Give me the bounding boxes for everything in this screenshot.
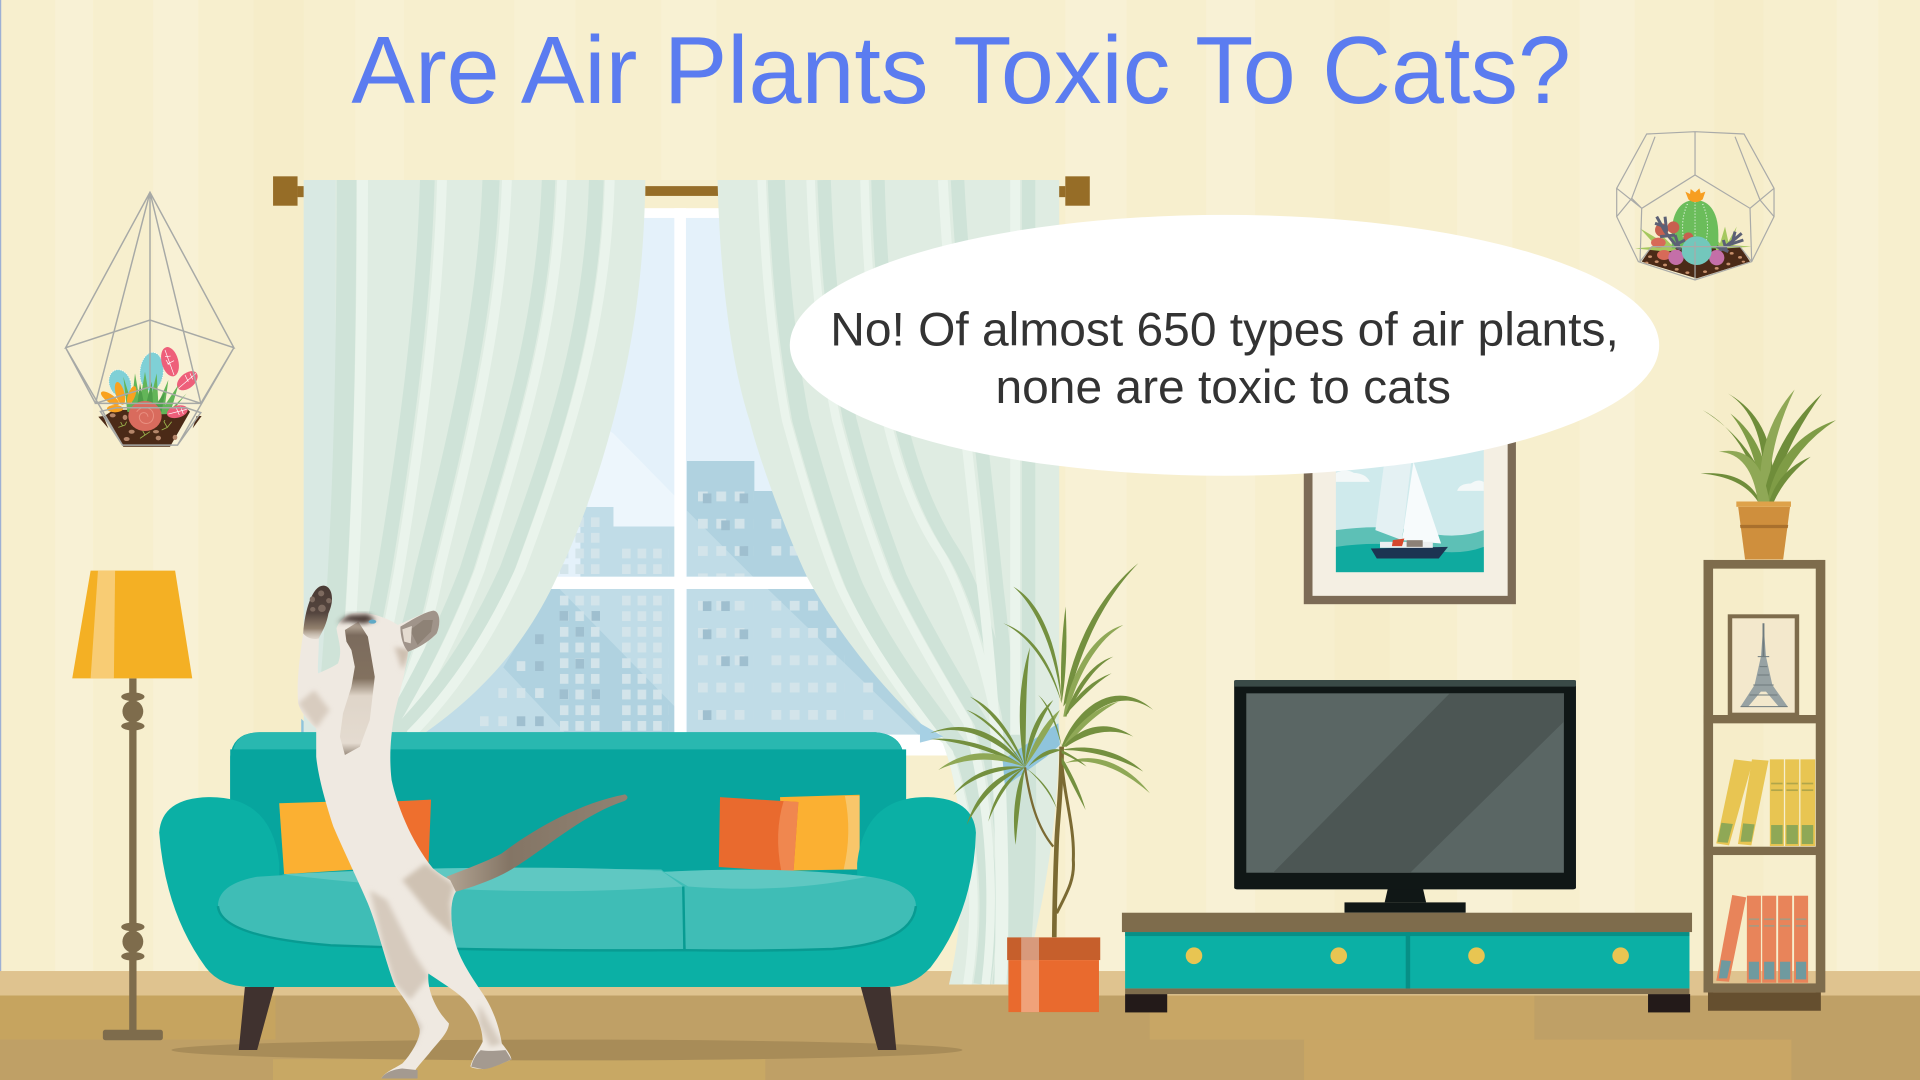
raised paw [303,586,332,639]
plants and soil [98,345,202,447]
cat feet [381,1050,511,1078]
grass [1635,227,1752,253]
potted plant on shelf [1701,389,1836,560]
cabinet [1122,913,1692,1012]
terracotta pot [1736,501,1791,560]
floor and baseboard [0,971,1920,1080]
speech bubble [790,215,1659,476]
boat [1371,538,1448,559]
floor lamp [72,571,192,1040]
cat shading [298,647,502,1047]
cat ear [400,611,439,652]
window with city view [301,208,970,756]
floor shadow under sofa [171,1040,962,1060]
cat face mask [338,614,376,624]
sails [1375,462,1441,544]
framed sailboat picture [1304,400,1516,604]
soil [1642,247,1750,278]
clouds [1336,471,1484,491]
orange books [1716,895,1808,983]
answer text: No! Of almost 650 types of air plants, [830,302,1619,355]
curtain rod [273,176,1090,206]
hanging terrarium right [1617,132,1774,280]
plant stems [1025,747,1073,937]
cactus [1672,188,1718,248]
tv [1234,680,1576,913]
buildings [367,461,967,736]
front arm [340,622,375,755]
right curtain [718,180,1059,984]
cat eye [369,620,376,624]
seat cushions [218,868,916,951]
succulents [1651,217,1743,265]
cat body [298,586,511,1078]
answer text: none are toxic to cats [996,360,1451,413]
plant leaves [930,563,1153,845]
yellow books [1716,759,1815,846]
shelf frame [1704,560,1825,992]
hanging terrarium left [66,192,234,447]
window glimpse behind leaves [920,723,1060,787]
glass frame [66,192,234,445]
bookshelf [1704,560,1825,1011]
pillows right [719,795,860,872]
sofa [159,732,976,1050]
floor plant with pot [920,563,1153,1012]
glass frame [1617,132,1774,280]
eiffel tower picture [1728,614,1799,715]
pillows left [279,800,431,874]
cat [298,586,627,1078]
tv and cabinet [1122,680,1692,1012]
leaves [1701,389,1836,501]
plant [920,563,1153,937]
left curtain [304,180,645,737]
title: Are Air Plants Toxic To Cats? [351,18,1571,124]
sofa body and arms [159,797,976,987]
pot [1007,937,1100,1012]
cat tail [446,794,627,892]
